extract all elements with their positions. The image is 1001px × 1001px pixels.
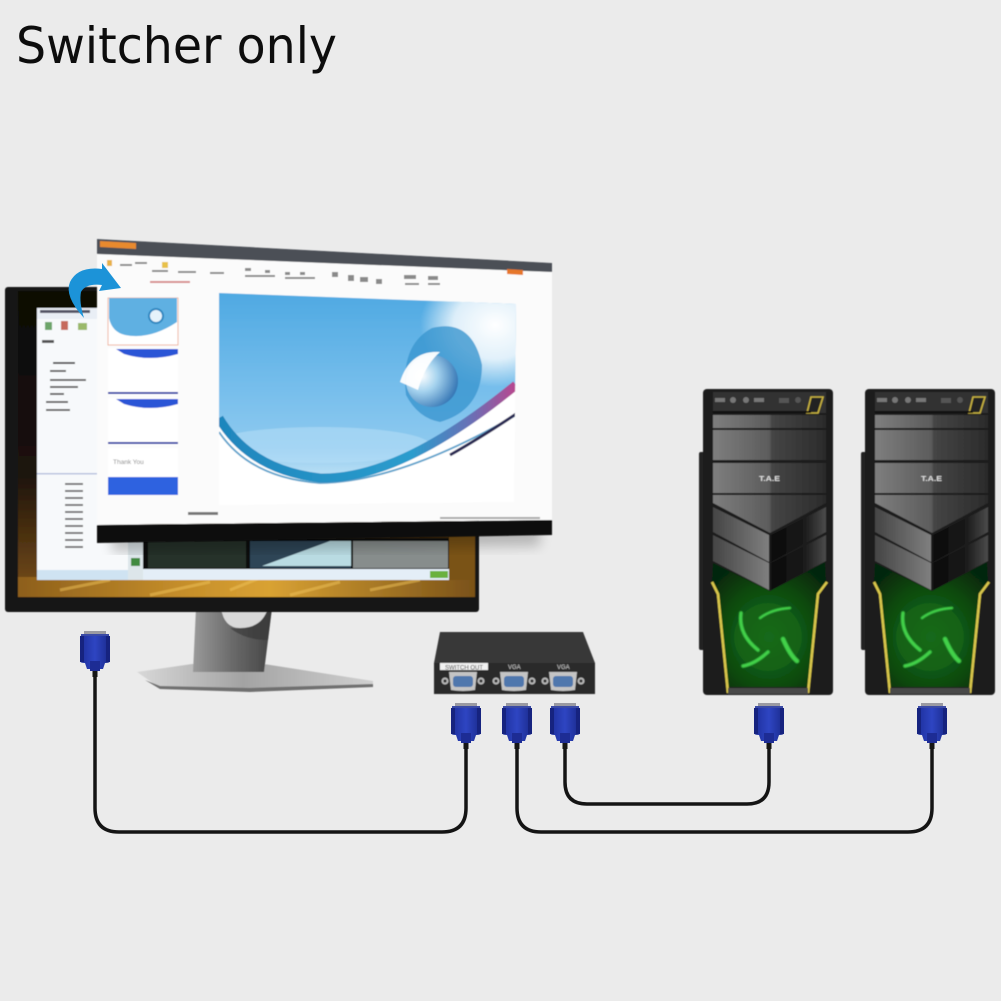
monitor stand bbox=[137, 608, 373, 692]
PC tower 1 bbox=[699, 389, 833, 695]
ports bbox=[442, 672, 484, 691]
drive bays bbox=[713, 415, 826, 428]
slide thumbnails bbox=[108, 298, 178, 495]
fan bbox=[734, 603, 802, 671]
explorer window bbox=[37, 308, 137, 580]
VGA connector: monitor cable bbox=[80, 631, 110, 677]
title: Switcher only bbox=[16, 17, 337, 75]
cable: switch to PC 1 bbox=[565, 745, 769, 804]
video thumbnails bbox=[128, 538, 449, 580]
yellow trim bbox=[712, 582, 728, 693]
blue arrow icon bbox=[69, 263, 121, 318]
side panel bbox=[699, 452, 705, 650]
stand neck bbox=[193, 608, 272, 672]
drive slot bbox=[713, 411, 811, 413]
slide thumbnails: Thank You bbox=[113, 459, 144, 466]
wave globe bbox=[405, 326, 482, 422]
back monitor bbox=[5, 287, 479, 612]
monitor shadow of front window bbox=[112, 522, 540, 552]
cable: switch to PC 2 bbox=[517, 745, 932, 832]
chevrons bbox=[713, 495, 826, 533]
PC tower 2 bbox=[861, 389, 995, 695]
green fan window bbox=[712, 562, 826, 687]
cable: monitor to switch bbox=[95, 672, 466, 832]
screen wallpaper bbox=[18, 291, 475, 597]
bezel bbox=[5, 287, 479, 612]
VGA connector: PC 1 bbox=[754, 703, 784, 749]
foot bbox=[728, 688, 808, 694]
top face bbox=[434, 632, 595, 663]
case body bbox=[703, 389, 833, 695]
front window on second monitor bbox=[97, 239, 570, 543]
switch box bbox=[434, 632, 595, 694]
black monitor chin bbox=[97, 520, 552, 543]
ribbon bbox=[120, 262, 440, 285]
VGA connector: switch input 1 bbox=[502, 703, 532, 749]
window body bbox=[97, 239, 552, 525]
yellow power badge bbox=[807, 397, 823, 413]
logo: T.A.E bbox=[759, 476, 780, 483]
switch box: VGA bbox=[557, 665, 570, 671]
VGA connector: switch input 2 bbox=[550, 703, 580, 749]
stand base bbox=[137, 664, 373, 691]
front face bbox=[434, 663, 595, 694]
switch box: SWITCH OUT bbox=[445, 664, 483, 672]
title bar bbox=[97, 239, 552, 272]
VGA connector: switch output bbox=[451, 703, 481, 749]
status strip bbox=[188, 512, 218, 515]
port labels: VGA bbox=[508, 665, 521, 671]
front ports bbox=[715, 397, 801, 403]
VGA connector: PC 2 bbox=[917, 703, 947, 749]
output label bbox=[440, 663, 488, 670]
main slide bbox=[218, 292, 516, 484]
